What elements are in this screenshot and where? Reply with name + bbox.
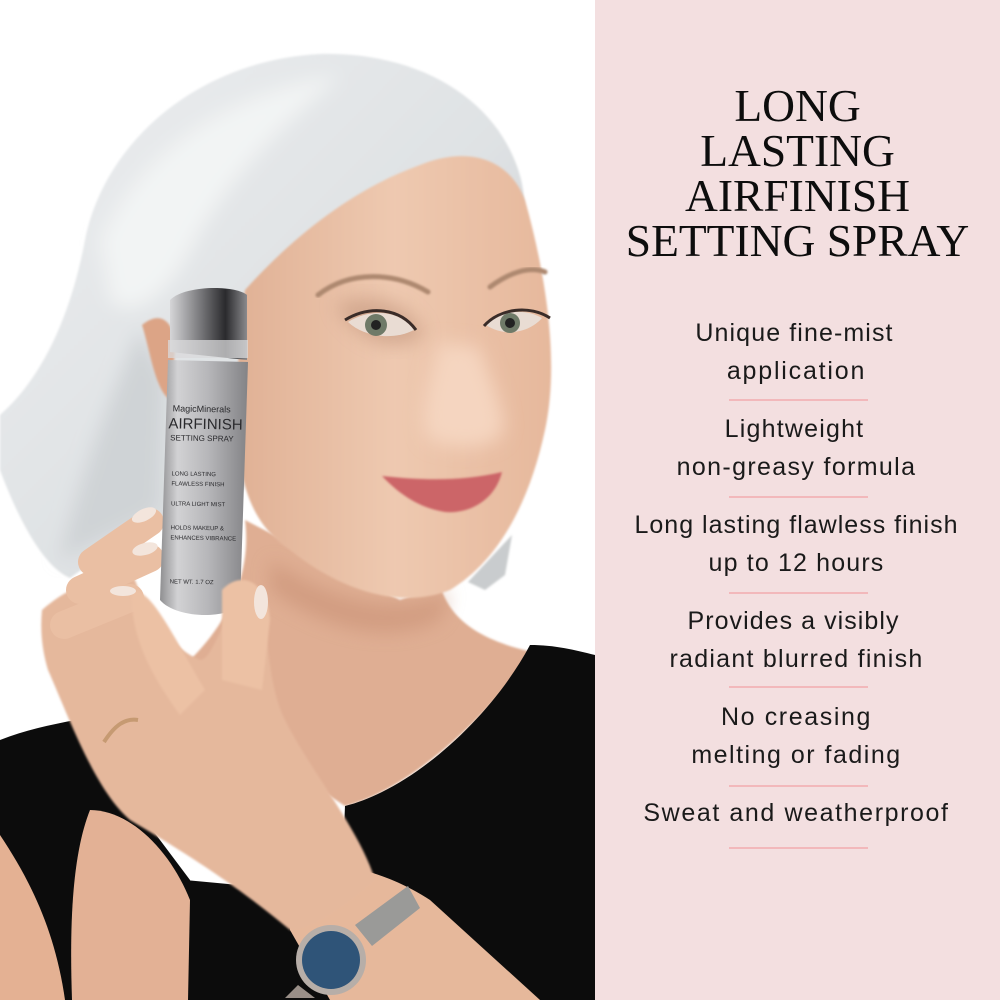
nose	[424, 340, 503, 447]
bottle label: SETTING SPRAY	[170, 433, 234, 444]
title: LONG	[734, 80, 861, 131]
bottle label: AIRFINISH	[168, 415, 243, 434]
title: LASTING	[700, 125, 895, 176]
photo: woman holding setting spray bottle	[0, 54, 595, 1000]
bottle	[160, 288, 248, 615]
eyes	[335, 298, 550, 345]
bottle label: HOLDS MAKEUP &	[171, 525, 224, 532]
lips	[382, 472, 502, 512]
benefit: lightweight: non-greasy formula	[677, 453, 916, 481]
neck and chest	[190, 520, 532, 806]
watch	[285, 886, 420, 998]
benefit: long lasting: up to 12 hours	[709, 549, 884, 577]
benefit: lightweight	[677, 415, 916, 481]
nails	[110, 504, 268, 619]
bottle label: FLAWLESS FINISH	[171, 481, 225, 488]
benefit: weatherproof: Sweat and weatherproof	[643, 799, 950, 827]
benefit: lightweight: Lightweight	[725, 415, 864, 443]
bottle label	[166, 403, 243, 587]
title: SETTING SPRAY	[626, 215, 969, 266]
title: AIRFINISH	[685, 170, 910, 221]
benefit: long lasting	[634, 511, 958, 577]
hair	[0, 54, 524, 590]
ear	[142, 318, 175, 400]
benefit: no creasing	[691, 703, 902, 769]
benefit: long lasting: Long lasting flawless finish	[634, 511, 958, 539]
benefit: fine mist	[695, 319, 894, 385]
bottle label: ENHANCES VIBRANCE	[170, 535, 236, 543]
benefit: no creasing: No creasing	[721, 703, 872, 731]
bottle label: NET WT. 1.7 OZ	[170, 579, 214, 586]
thumb and index finger	[132, 580, 270, 715]
benefit: radiant: Provides a visibly	[687, 607, 900, 635]
benefit: fine mist: Unique fine-mist	[695, 319, 894, 347]
benefit: fine mist: application	[727, 357, 866, 385]
black top	[0, 645, 595, 1000]
benefit: no creasing: melting or fading	[691, 741, 902, 769]
ring	[104, 720, 138, 742]
bottle label: ULTRA LIGHT MIST	[171, 501, 226, 508]
eyebrows	[318, 270, 545, 295]
benefit: radiant: radiant blurred finish	[669, 645, 924, 673]
title	[626, 80, 969, 266]
fingers	[64, 522, 150, 625]
benefit: radiant	[669, 607, 924, 673]
neck shadow	[270, 560, 450, 632]
face	[238, 156, 551, 598]
panel: benefits	[595, 0, 1000, 1000]
forearm	[71, 810, 190, 1000]
hand	[41, 577, 375, 930]
bottle label: MagicMinerals	[173, 403, 231, 414]
bottle label: LONG LASTING	[172, 471, 216, 478]
left shoulder skin	[0, 835, 65, 1000]
